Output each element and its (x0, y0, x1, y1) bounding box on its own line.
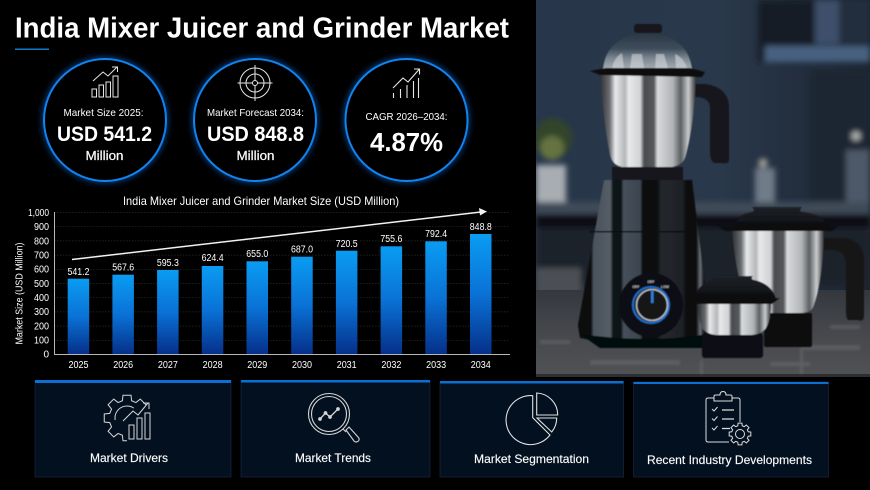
stat circle: market forecast 2034 (194, 59, 316, 181)
value labels: 595.3 (157, 258, 179, 269)
year labels: 2034 (471, 360, 491, 371)
y axis labels: 100 (34, 336, 49, 346)
bars (68, 234, 491, 354)
blender base (578, 180, 708, 348)
label: CAGR 2026–2034: (366, 111, 448, 123)
year labels: 2026 (113, 360, 134, 371)
y axis labels: 300 (34, 307, 49, 318)
medium jar (718, 207, 864, 347)
year labels: 2028 (203, 360, 223, 371)
y axis labels: 1,000 (28, 208, 49, 219)
y axis labels: 700 (34, 250, 49, 262)
value labels (68, 222, 492, 278)
value labels: 720.5 (336, 239, 358, 250)
label: Recent Industry Developments (647, 453, 812, 467)
value: USD 541.2 (57, 123, 152, 146)
chart title: India Mixer Juicer and Grinder Market Size (USD Million) (123, 194, 399, 208)
card: recent industry developments (634, 382, 828, 477)
jar collar (612, 167, 683, 181)
year labels: 2029 (247, 360, 268, 371)
card: market drivers (35, 380, 231, 477)
y axis title: Market Size (USD Million) (14, 242, 26, 344)
stat circle: market size 2025 (44, 59, 166, 181)
y axis labels: 0 (43, 350, 49, 360)
icon: magnifier (308, 394, 359, 442)
title: India Mixer Juicer and Grinder Market (15, 12, 509, 44)
card: market segmentation (440, 381, 624, 477)
icon: pie chart (506, 393, 558, 445)
label: Market Forecast 2034: (207, 107, 304, 119)
y axis labels: 800 (34, 236, 49, 248)
y axis labels: 900 (34, 222, 49, 233)
photo: mixer grinder set in kitchen (534, 0, 870, 377)
year labels: 2025 (68, 360, 89, 371)
y axis labels: 600 (34, 264, 49, 276)
jar rim (590, 68, 705, 77)
blurred kitchen background (534, 0, 870, 308)
label: Market Segmentation (474, 452, 589, 466)
jar handle (694, 84, 730, 164)
title underline (15, 48, 49, 50)
icon: rising bars (92, 67, 118, 97)
label: Market Size 2025: (64, 107, 144, 119)
year labels: 2031 (337, 360, 357, 371)
year labels: 2032 (381, 360, 402, 371)
main blender jar (590, 24, 729, 181)
value: USD 848.8 (207, 123, 304, 146)
value labels: 755.6 (380, 234, 403, 245)
value labels: 848.8 (470, 222, 492, 233)
icon: target (238, 65, 272, 101)
value labels: 624.4 (202, 253, 224, 264)
icon: gear with chart (104, 395, 153, 443)
dial labels: OFF (632, 285, 640, 289)
control dial (619, 273, 683, 337)
value labels: 655.0 (246, 249, 269, 260)
value labels: 541.2 (68, 267, 90, 278)
value: 4.87% (370, 127, 443, 157)
label: Market Trends (295, 451, 371, 465)
blender base: OFF (648, 280, 654, 284)
card: market trends (241, 380, 430, 477)
granite counter (536, 290, 870, 377)
dome lid (603, 32, 692, 69)
icon: clipboard with gear (706, 392, 751, 445)
jar body (600, 73, 696, 167)
y axis labels: 400 (34, 293, 49, 304)
y axis labels (28, 208, 49, 360)
label: Market Drivers (90, 451, 168, 465)
year labels: 2030 (292, 360, 312, 371)
year labels: 2033 (426, 360, 446, 371)
axes (54, 212, 510, 354)
y axis labels: 200 (34, 322, 49, 332)
bar chart (14, 194, 510, 371)
unit: Million (236, 148, 274, 163)
icon: growth line (393, 69, 420, 98)
value labels: 567.6 (112, 262, 135, 274)
blender base: LOW (661, 285, 670, 289)
y axis labels: 500 (34, 279, 49, 290)
value labels: 792.4 (425, 229, 447, 240)
stat circle: CAGR (346, 59, 468, 181)
arrow: growth trend (72, 208, 487, 260)
year labels (68, 360, 491, 371)
unit: Million (86, 148, 124, 163)
year labels: 2027 (158, 360, 178, 371)
small jar (688, 276, 780, 358)
value labels: 687.0 (291, 244, 313, 256)
